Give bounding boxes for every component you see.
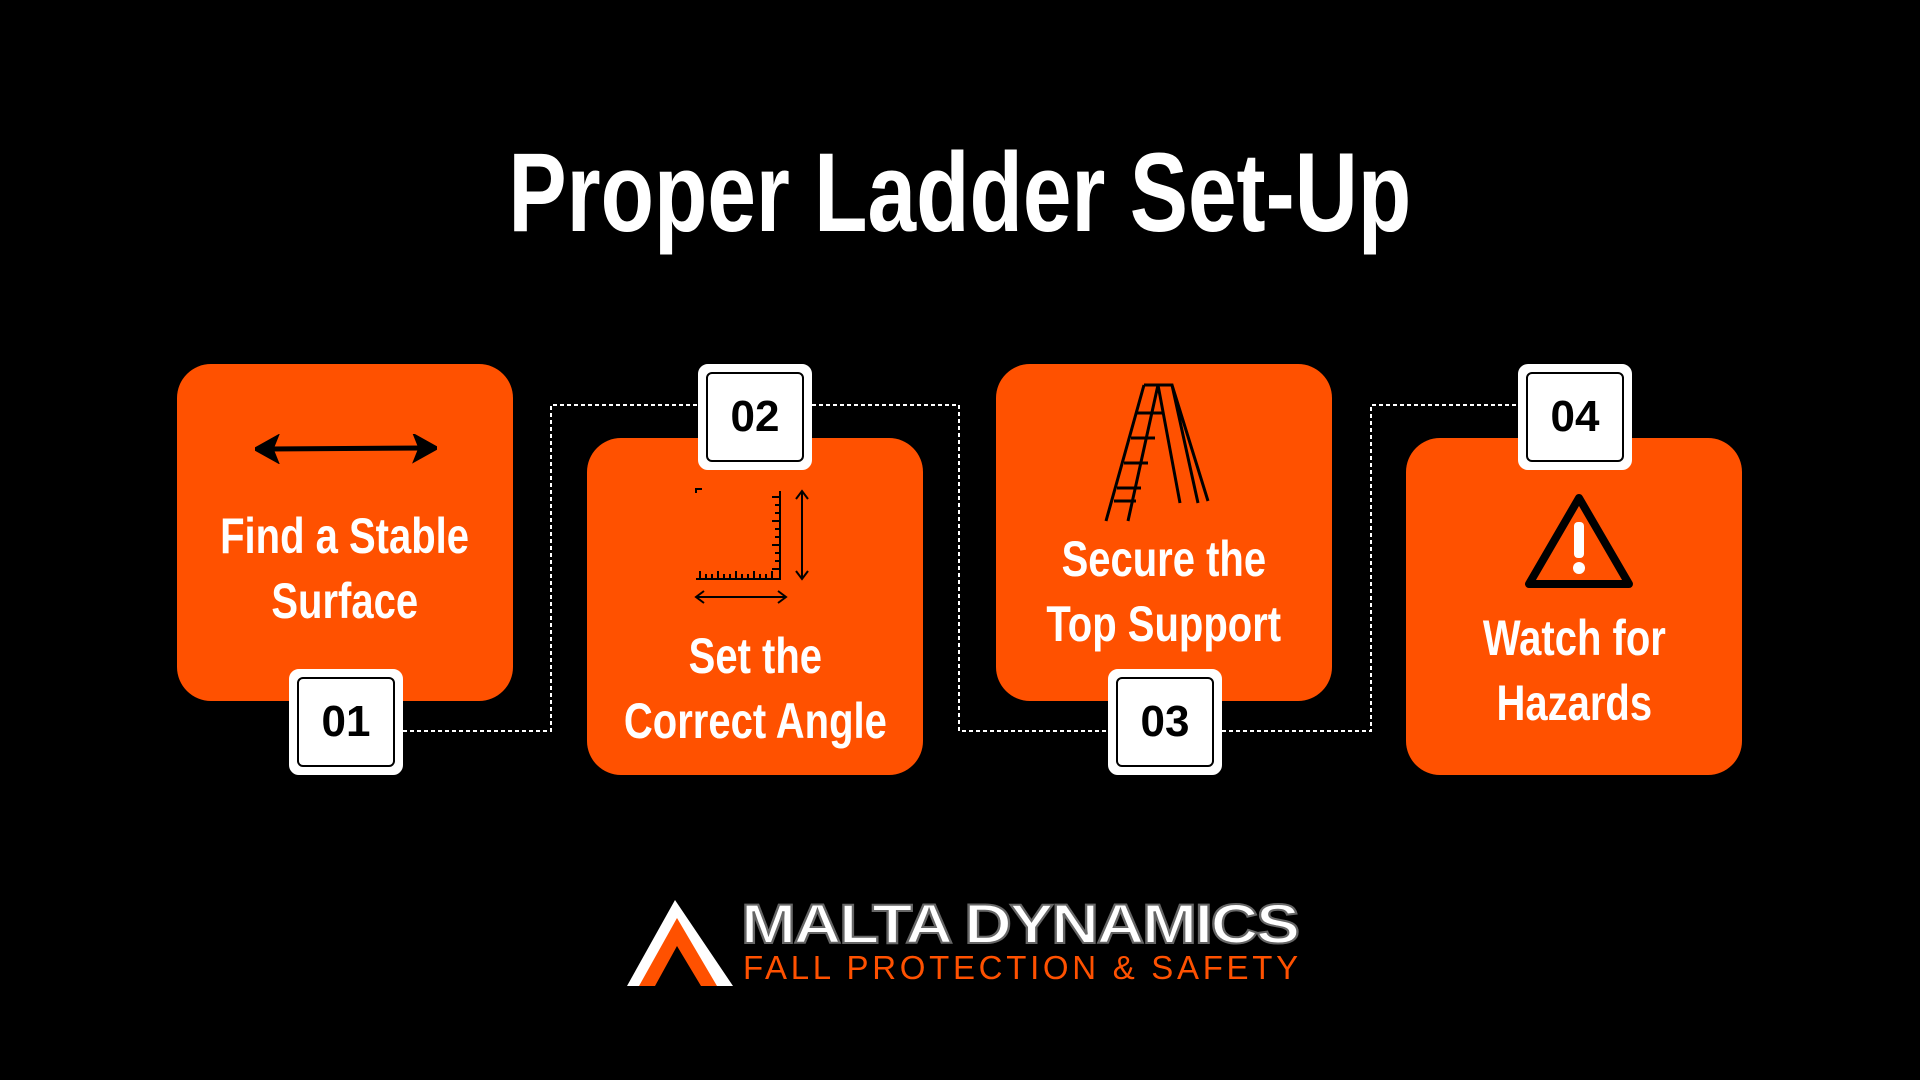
logo: FALL PROTECTION & SAFETY <box>743 949 1302 986</box>
text: step 4: Hazards <box>1496 675 1652 731</box>
logo <box>627 892 1302 986</box>
title: Proper Ladder Set-Up <box>509 130 1411 255</box>
text: step 3: Top Support <box>1047 596 1281 652</box>
icon: logo mark <box>627 900 733 986</box>
text: step 2 <box>623 628 886 749</box>
icon: double arrow <box>255 434 437 464</box>
badge 02 <box>698 364 812 470</box>
panel: step 1 <box>177 364 513 701</box>
text: step 1: Find a Stable <box>221 508 469 564</box>
text: step 2: Set the <box>688 628 822 684</box>
logo text: MALTA DYNAMICS <box>741 892 1298 955</box>
badge 01: 01 <box>322 697 370 746</box>
icon: warning <box>1525 494 1633 588</box>
badge 01 <box>289 669 403 775</box>
badge 03: 03 <box>1141 697 1189 746</box>
badge 04: 04 <box>1551 392 1599 441</box>
panel: step 4 <box>1406 438 1742 775</box>
text: step 1: Surface <box>272 573 418 629</box>
panel: step 3 <box>996 364 1332 701</box>
text: step 4: Watch for <box>1483 610 1665 666</box>
badge 04 <box>1518 364 1632 470</box>
icon: angle ruler <box>694 488 809 604</box>
text: step 3: Secure the <box>1062 531 1266 587</box>
text: step 4 <box>1482 610 1666 731</box>
badge 02: 02 <box>731 392 779 441</box>
panel: step 2 <box>587 438 923 775</box>
text: step 2: Correct Angle <box>623 693 886 749</box>
icon: ladder <box>1104 384 1210 522</box>
text: step 1 <box>221 508 469 629</box>
badge 03 <box>1108 669 1222 775</box>
text: step 3 <box>1046 531 1281 652</box>
